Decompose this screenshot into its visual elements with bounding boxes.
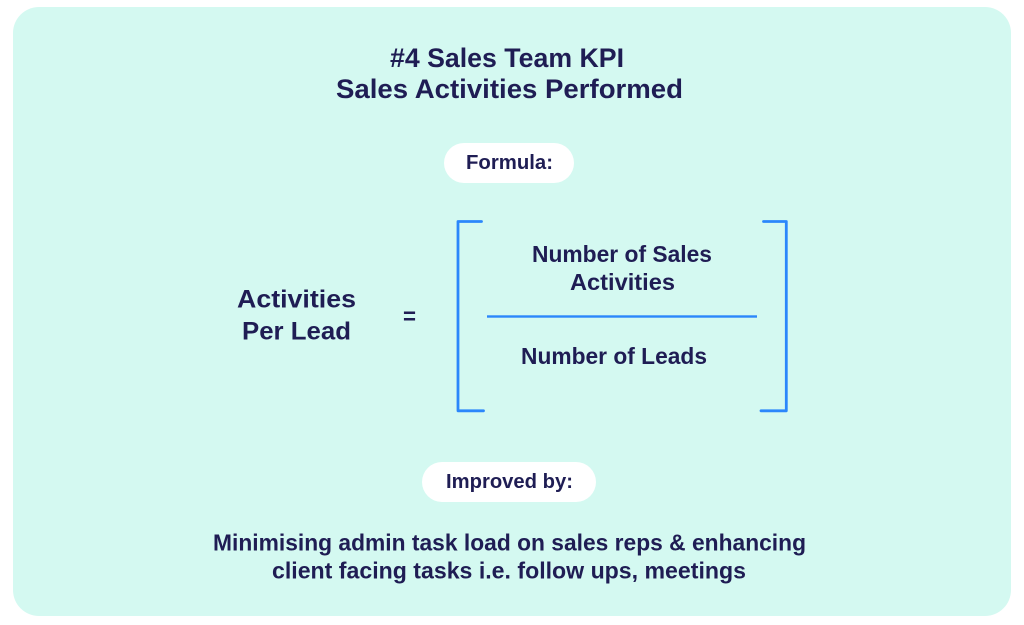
formula left side: activities per lead: Per Lead [242, 318, 351, 346]
badge: improved by: Improved by: [446, 471, 573, 493]
badge: formula: Formula: [466, 152, 553, 174]
numerator: Activities [570, 269, 675, 295]
improvement description: client facing tasks i.e. follow ups, meetings [272, 558, 746, 584]
equals sign: = [403, 303, 416, 329]
left bracket [458, 222, 484, 411]
title: #4 Sales Team KPI [390, 43, 624, 73]
formula left side: activities per lead [237, 286, 356, 346]
improvement description [213, 530, 806, 584]
improvement description: Minimising admin task load on sales reps & enhancing [213, 530, 806, 556]
formula left side: activities per lead: Activities [237, 286, 356, 314]
badge: improved by [422, 462, 596, 502]
numerator [532, 241, 712, 295]
numerator: Number of Sales [532, 241, 712, 267]
denominator: Number of Leads [521, 343, 707, 369]
badge: formula [444, 143, 574, 183]
fraction line [487, 315, 757, 318]
title: Sales Activities Performed [336, 74, 683, 104]
right bracket [761, 222, 786, 411]
title [336, 43, 683, 104]
